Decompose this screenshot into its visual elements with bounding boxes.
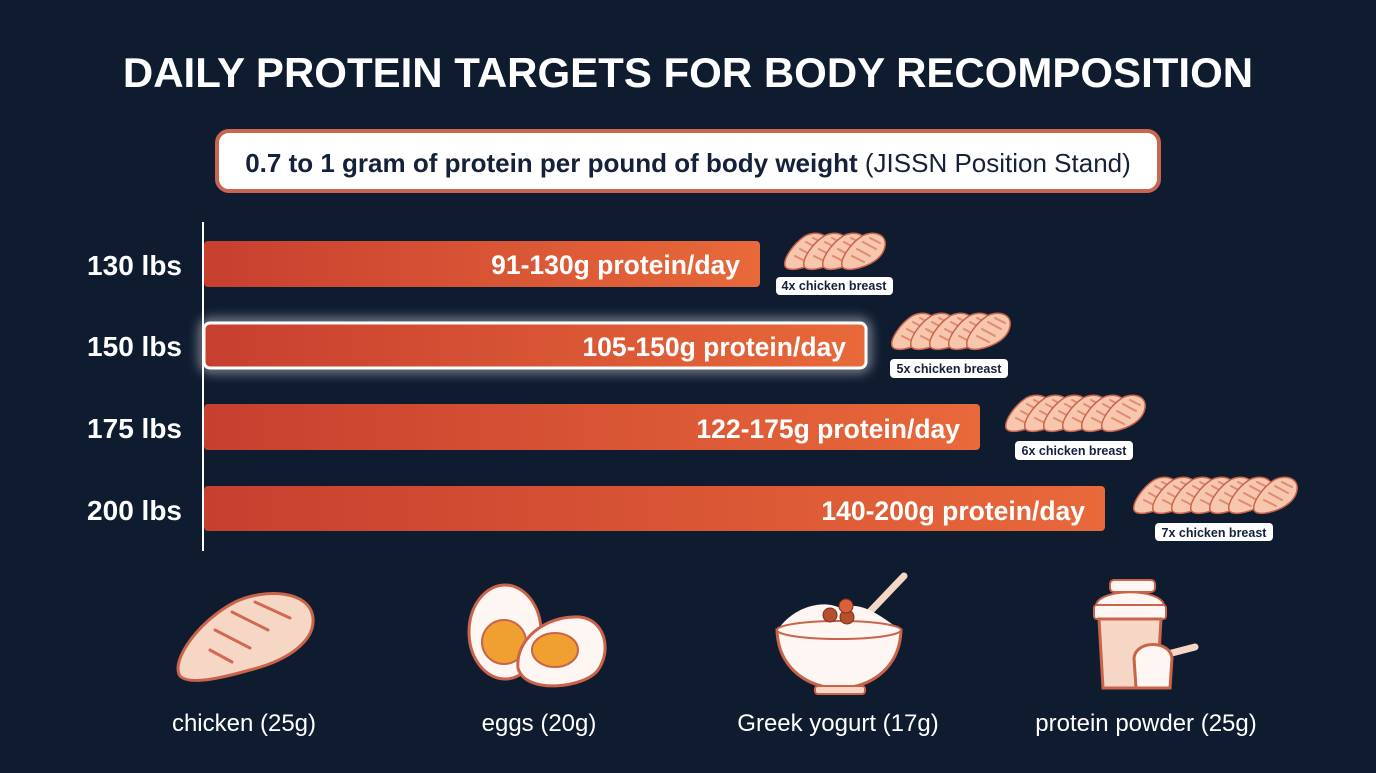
row labels: 175 lbs bbox=[87, 413, 182, 444]
bar: 200 lbs bbox=[204, 486, 1105, 531]
bar: 130 lbs: 91-130g protein/day bbox=[491, 250, 740, 280]
food: protein powder: protein powder (25g) bbox=[1035, 710, 1257, 737]
row labels bbox=[87, 250, 182, 526]
chicken icons: 6x: 6x chicken breast bbox=[1022, 444, 1127, 458]
food: chicken: chicken (25g) bbox=[172, 710, 316, 737]
title: DAILY PROTEIN TARGETS FOR BODY RECOMPOSITION bbox=[123, 49, 1253, 96]
chicken icons: 5x bbox=[890, 313, 1010, 378]
chicken icons: 4x bbox=[776, 233, 893, 295]
bar: 200 lbs: 140-200g protein/day bbox=[821, 496, 1085, 526]
bar: 150 lbs highlighted: 105-150g protein/day bbox=[582, 332, 846, 362]
axis line bbox=[202, 222, 204, 551]
chicken icons: 6x bbox=[1006, 395, 1145, 460]
row labels: 200 lbs bbox=[87, 495, 182, 526]
bar: 175 lbs: 122-175g protein/day bbox=[696, 414, 960, 444]
subtitle box bbox=[217, 131, 1159, 191]
row labels: 130 lbs bbox=[87, 250, 182, 281]
food: chicken bbox=[172, 594, 316, 737]
chicken icons: 5x: 5x chicken breast bbox=[897, 362, 1002, 376]
subtitle box: 0.7 to 1 gram of protein per pound of body weight (JISSN Position Stand) bbox=[245, 148, 1131, 178]
food: eggs: eggs (20g) bbox=[482, 710, 596, 737]
food: eggs bbox=[469, 585, 605, 737]
row labels: 150 lbs bbox=[87, 331, 182, 362]
chicken icons: 7x bbox=[1134, 477, 1297, 541]
bar: 130 lbs bbox=[204, 241, 760, 287]
bar: 150 lbs highlighted bbox=[204, 323, 866, 368]
chicken icons: 4x: 4x chicken breast bbox=[782, 279, 887, 293]
bar: 175 lbs bbox=[204, 404, 980, 450]
food: greek yogurt: Greek yogurt (17g) bbox=[737, 710, 939, 737]
chicken icons: 7x: 7x chicken breast bbox=[1162, 526, 1267, 540]
food: protein powder bbox=[1035, 580, 1257, 737]
food: greek yogurt bbox=[737, 576, 939, 737]
